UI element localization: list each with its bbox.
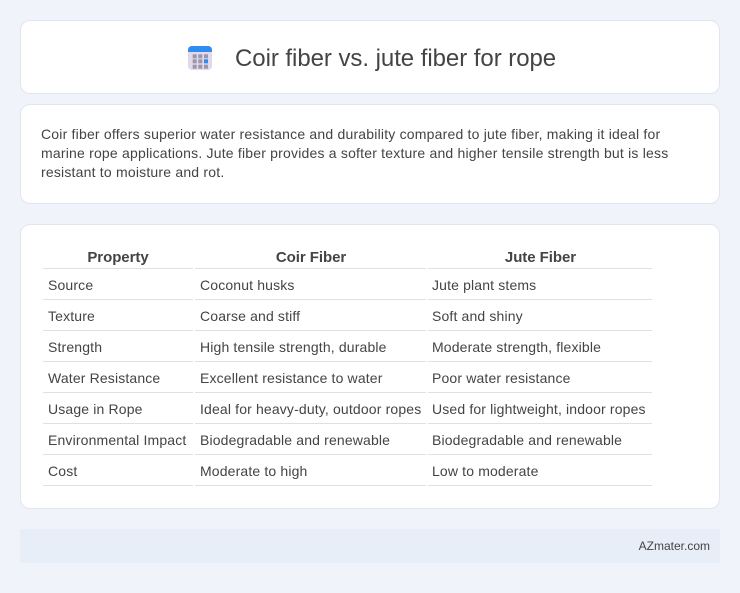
table rows: Soft and shiny bbox=[432, 308, 523, 324]
table rows: Coarse and stiff bbox=[200, 308, 300, 324]
table rows: Usage in Rope bbox=[48, 401, 143, 417]
table rows: Texture bbox=[48, 308, 95, 324]
description text: Coir fiber offers superior water resistance and durability compared to jute fiber, making it ideal for bbox=[41, 126, 660, 142]
table rows: Coconut husks bbox=[200, 277, 295, 293]
table rows: Source bbox=[48, 277, 93, 293]
footer credit: AZmater.com bbox=[639, 539, 710, 553]
table rows: Environmental Impact bbox=[48, 432, 186, 448]
description text: marine rope applications. Jute fiber provides a softer texture and higher tensile strength but is less bbox=[41, 145, 668, 161]
table rows bbox=[43, 268, 652, 486]
title: Coir fiber vs. jute fiber for rope bbox=[235, 45, 556, 72]
panel: title card bbox=[20, 20, 720, 94]
icon: calendar bbox=[188, 46, 212, 70]
table header row: Coir Fiber bbox=[276, 249, 346, 266]
table rows: Low to moderate bbox=[432, 463, 539, 479]
table rows: Biodegradable and renewable bbox=[200, 432, 390, 448]
table rows: Moderate to high bbox=[200, 463, 307, 479]
table rows: Excellent resistance to water bbox=[200, 370, 383, 386]
table rows: Used for lightweight, indoor ropes bbox=[432, 401, 646, 417]
table rows: High tensile strength, durable bbox=[200, 339, 387, 355]
table rows: Cost bbox=[48, 463, 77, 479]
table rows: Water Resistance bbox=[48, 370, 160, 386]
table rows: Jute plant stems bbox=[432, 277, 536, 293]
footer bar bbox=[20, 529, 720, 563]
table header row bbox=[87, 249, 576, 266]
table header row: Jute Fiber bbox=[505, 249, 576, 266]
table rows: Biodegradable and renewable bbox=[432, 432, 622, 448]
table rows: Ideal for heavy-duty, outdoor ropes bbox=[200, 401, 421, 417]
table rows: Moderate strength, flexible bbox=[432, 339, 601, 355]
table header row: Property bbox=[87, 249, 149, 266]
table rows: Poor water resistance bbox=[432, 370, 571, 386]
panel: comparison table bbox=[20, 224, 720, 509]
panel: description bbox=[20, 104, 720, 204]
table rows: Strength bbox=[48, 339, 102, 355]
description text bbox=[41, 126, 668, 180]
description text: resistant to moisture and rot. bbox=[41, 164, 224, 180]
